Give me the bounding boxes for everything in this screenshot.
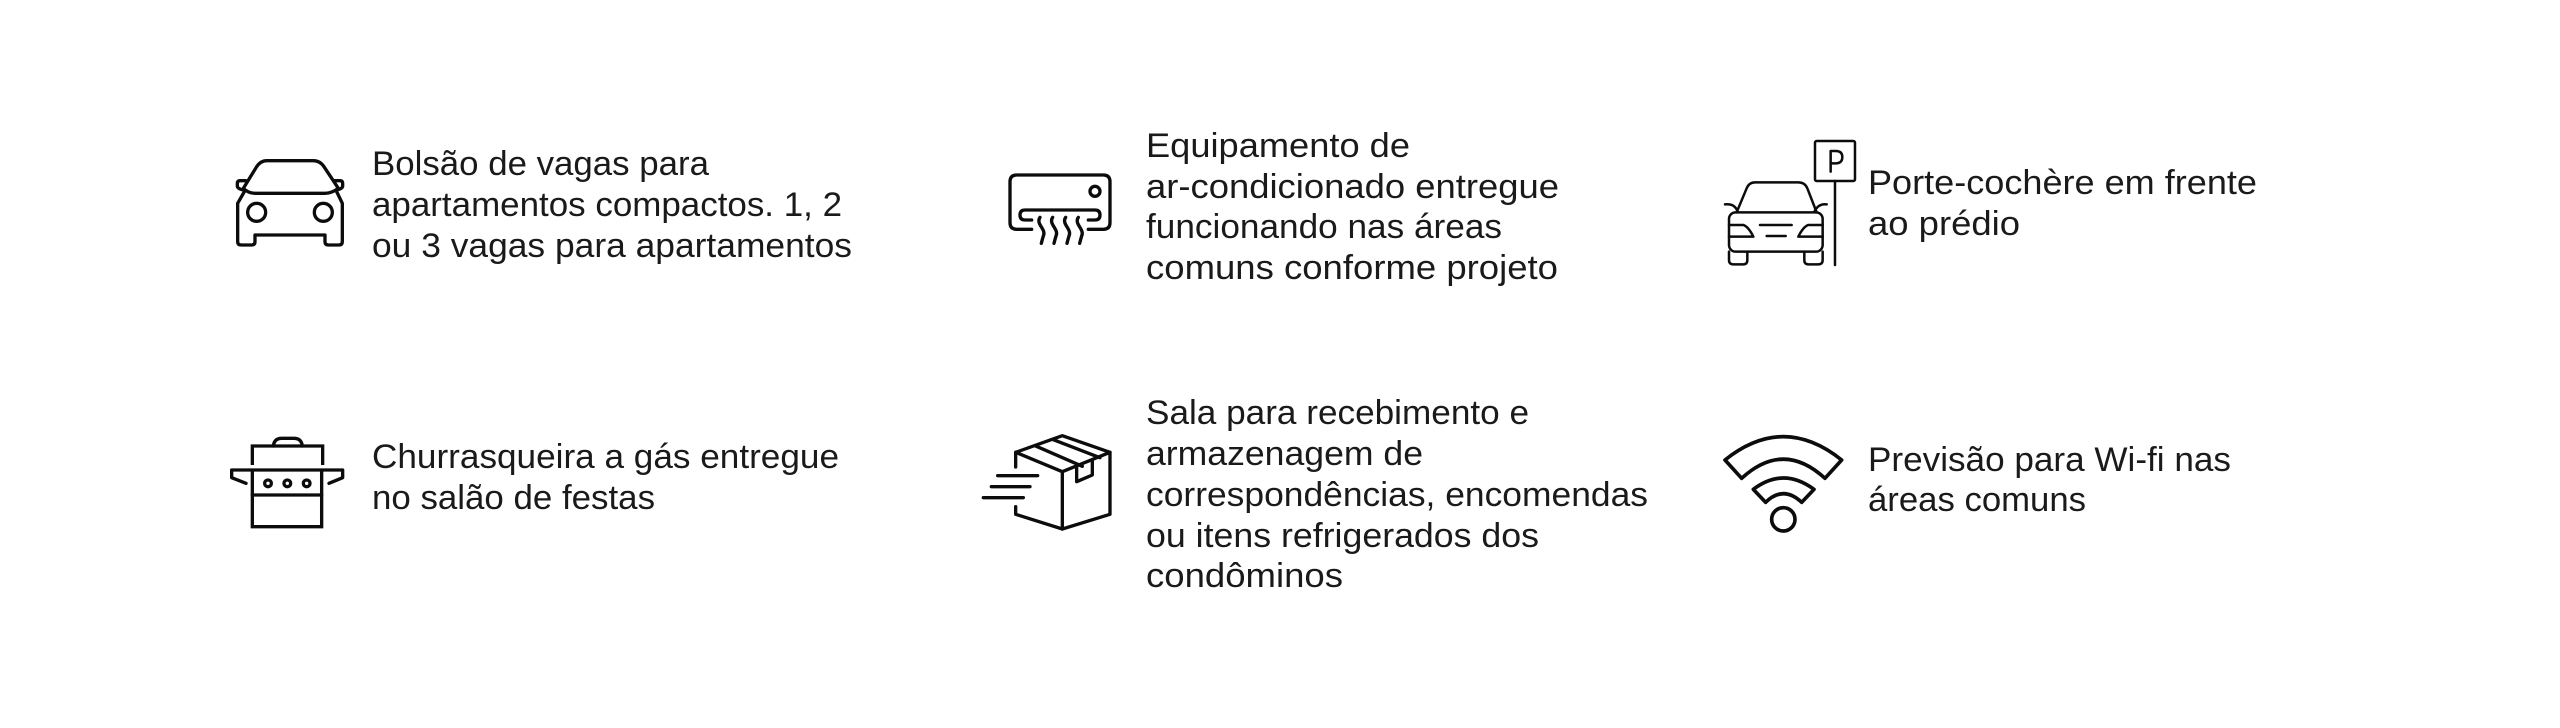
- icon: car front: [237, 161, 343, 245]
- text: porte-cochère description: ao prédio: [1868, 205, 2020, 243]
- text: package room description: Sala para recebimento e: [1146, 394, 1529, 432]
- text: Wi-Fi description: áreas comuns: [1868, 481, 2086, 519]
- text: barbecue description: [372, 438, 839, 517]
- item: parking for compact apartments: [237, 145, 852, 265]
- text: package room description: correspondências, encomendas: [1146, 476, 1648, 514]
- text: air conditioning description: Equipamento de: [1146, 127, 1410, 165]
- text: parking description: [372, 145, 852, 265]
- icon: air conditioner: [1010, 175, 1110, 243]
- text: porte-cochère description: Porte-cochère em frente: [1868, 164, 2257, 202]
- text: package room description: ou itens refrigerados dos: [1146, 517, 1539, 555]
- text: barbecue description: no salão de festas: [372, 479, 655, 517]
- text: Wi-Fi description: [1868, 441, 2231, 519]
- text: air conditioning description: ar-condicionado entregue: [1146, 168, 1559, 206]
- text: package room description: armazenagem de: [1146, 435, 1423, 473]
- icon: gas grill: [232, 438, 343, 527]
- item: air conditioning: [1010, 127, 1559, 287]
- text: air conditioning description: comuns conforme projeto: [1146, 249, 1558, 287]
- text: package room description: [1146, 394, 1648, 595]
- icon: wifi signal: [1725, 437, 1842, 531]
- text: parking description: Bolsão de vagas para: [372, 145, 709, 183]
- text: parking description: ou 3 vagas para apartamentos: [372, 227, 852, 265]
- item: Wi-Fi: [1725, 437, 2231, 531]
- text: air conditioning description: [1146, 127, 1559, 287]
- icon: delivery box: [983, 436, 1110, 529]
- text: Wi-Fi description: Previsão para Wi-fi nas: [1868, 441, 2231, 479]
- text: package room description: condôminos: [1146, 557, 1343, 595]
- item: gas barbecue: [232, 438, 839, 527]
- text: air conditioning description: funcionando nas áreas: [1146, 208, 1502, 246]
- text: barbecue description: Churrasqueira a gás entregue: [372, 438, 839, 476]
- text: parking description: apartamentos compactos. 1, 2: [372, 186, 842, 224]
- item: porte-cochère: [1725, 141, 2257, 265]
- item: package room: [983, 394, 1648, 595]
- text: porte-cochère description: [1868, 164, 2257, 243]
- icon: car with parking sign: [1725, 141, 1855, 265]
